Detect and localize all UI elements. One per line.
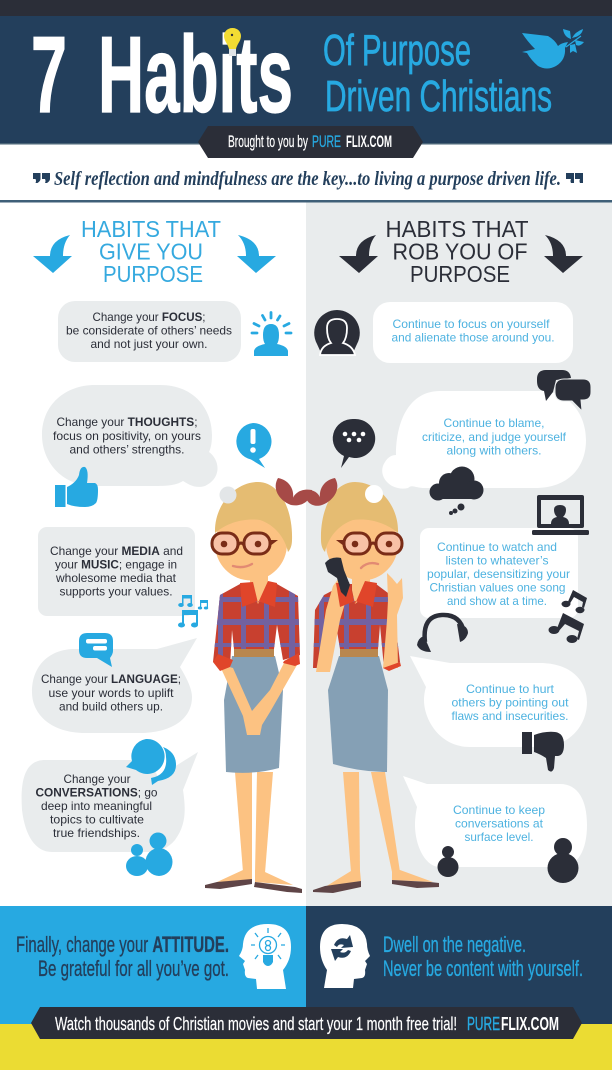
icon: person with rays bbox=[252, 312, 291, 356]
icon: two people blue bbox=[126, 832, 172, 876]
panel: hurt others bbox=[410, 656, 587, 747]
icon: person in dark circle bbox=[314, 310, 360, 355]
title: 7 Habits bbox=[31, 14, 293, 136]
shirt bbox=[313, 584, 400, 668]
banner: brought to you by bbox=[198, 126, 423, 158]
subtitle bbox=[323, 26, 552, 121]
icon: music notes blue bbox=[178, 595, 208, 628]
panel: language: use your words to uplift bbox=[48, 686, 174, 700]
panel: blame bbox=[382, 391, 586, 489]
neck bbox=[250, 574, 268, 604]
icon: chat circles bbox=[126, 739, 176, 785]
banner: free trial call to action bbox=[31, 1007, 582, 1039]
legs and feet bbox=[205, 772, 302, 893]
icon: dark cloud bbox=[430, 466, 484, 515]
smile bbox=[233, 564, 252, 567]
text: dwell on the negative bbox=[383, 932, 583, 981]
arrow: right blue bbox=[237, 235, 276, 273]
panel: language: Change your LANGUAGE; bbox=[41, 672, 181, 686]
subtitle: Of Purpose bbox=[323, 26, 471, 75]
face bbox=[215, 508, 287, 580]
panel: watch and listen: Continue to watch and bbox=[437, 540, 557, 554]
arm holding phone bbox=[316, 574, 349, 672]
heading: habits that rob you of purpose: PURPOSE bbox=[410, 261, 510, 287]
panel: conversations: true friendships. bbox=[53, 826, 140, 840]
heading: habits that give you purpose bbox=[81, 216, 221, 287]
icon: exclamation bubble bbox=[236, 423, 272, 468]
heading: habits that give you purpose: PURPOSE bbox=[103, 261, 203, 287]
arrow: left blue bbox=[33, 235, 72, 273]
icon: headphones bbox=[417, 615, 468, 652]
skirt bbox=[328, 656, 388, 772]
icon: two people dark bbox=[438, 838, 578, 883]
character: happy girl bbox=[205, 478, 312, 893]
text: attitude: Finally, change your ATTITUDE. bbox=[16, 932, 229, 957]
panel: watch and listen: and show at a time. bbox=[447, 594, 547, 608]
legs and feet bbox=[313, 772, 439, 893]
panel: media: your MUSIC; engage in bbox=[55, 558, 177, 572]
panel: conversations: topics to cultivate bbox=[50, 812, 144, 826]
collar bbox=[240, 581, 277, 607]
panel: media: Change your MEDIA and bbox=[50, 544, 183, 558]
heading: habits that give you purpose: GIVE YOU bbox=[99, 238, 203, 264]
glasses bbox=[336, 533, 402, 554]
panel: hurt others: Continue to hurt bbox=[466, 682, 555, 696]
icon: head with lightbulb bbox=[239, 924, 291, 989]
hair bbox=[215, 482, 292, 552]
icon: laptop bbox=[532, 495, 589, 535]
thought bubble circle left bbox=[220, 486, 236, 504]
panel: thoughts: Change your THOUGHTS; bbox=[56, 415, 198, 429]
heading: habits that rob you of purpose: ROB YOU OF bbox=[392, 238, 528, 264]
icon: dark speech bubble with dots bbox=[333, 419, 375, 468]
panel: focus: Change your FOCUS; bbox=[92, 310, 206, 324]
glasses bbox=[212, 533, 278, 554]
icon: light bulb bbox=[224, 28, 241, 56]
icon: chat message bbox=[79, 633, 113, 667]
icon: music notes dark bbox=[548, 590, 587, 643]
bow bbox=[304, 478, 337, 506]
text: attitude bbox=[16, 932, 229, 981]
shirt bbox=[210, 584, 305, 671]
panel: language: and build others up. bbox=[59, 700, 163, 714]
belt bbox=[340, 648, 378, 657]
panel: surface level: surface level. bbox=[464, 830, 534, 844]
icon: two chat bubbles bbox=[537, 370, 591, 411]
character: worried girl on phone bbox=[304, 478, 439, 893]
banner: brought to you by: FLIX.COM bbox=[346, 133, 392, 151]
panel: thoughts: and others’ strengths. bbox=[70, 442, 184, 456]
panel: thoughts bbox=[42, 385, 218, 487]
heading: habits that give you purpose: HABITS THAT bbox=[81, 216, 221, 242]
panel: focus on yourself bbox=[373, 302, 573, 363]
panel: watch and listen: popular, desensitizing your bbox=[427, 567, 570, 581]
icon: dove bbox=[522, 29, 584, 68]
panel: focus: and not just your own. bbox=[90, 337, 208, 351]
panel: blame: Continue to blame, bbox=[444, 416, 544, 430]
panel: language bbox=[32, 638, 197, 733]
frown bbox=[361, 563, 378, 568]
banner: brought to you by: PURE bbox=[312, 133, 341, 151]
panel: conversations: CONVERSATIONS; go bbox=[36, 786, 158, 800]
panel: focus on yourself: and alienate those around you. bbox=[392, 330, 554, 344]
banner: free trial call to action: Watch thousands of Christian movies and start your 1 month free trial! bbox=[55, 1013, 457, 1034]
panel: watch and listen: listen to whatever’s bbox=[446, 554, 548, 568]
belt bbox=[234, 648, 274, 657]
heading: habits that rob you of purpose: HABITS THAT bbox=[386, 216, 528, 242]
panel: blame: criticize, and judge yourself bbox=[422, 430, 567, 444]
panel: blame: along with others. bbox=[446, 444, 542, 458]
panel: media bbox=[38, 527, 195, 616]
panel: surface level: Continue to keep bbox=[453, 803, 545, 817]
icon: thumbs down bbox=[522, 732, 564, 772]
panel: surface level: conversations at bbox=[455, 816, 544, 830]
hair bbox=[321, 482, 398, 552]
skirt bbox=[224, 656, 283, 773]
icon: thumbs up bbox=[55, 467, 98, 507]
panel: hurt others: flaws and insecurities. bbox=[452, 709, 568, 723]
panel: focus: be considerate of others’ needs bbox=[66, 324, 232, 338]
panel: focus bbox=[58, 301, 241, 362]
thought bubble circle right bbox=[365, 485, 383, 503]
panel: media: supports your values. bbox=[60, 584, 172, 598]
heading: habits that rob you of purpose bbox=[386, 216, 528, 287]
panel: surface level bbox=[403, 776, 587, 867]
panel: watch and listen bbox=[420, 528, 578, 618]
arrow: left dark bbox=[339, 235, 378, 273]
title: 7 Habits: 7 bbox=[31, 14, 67, 136]
panel: thoughts: focus on positivity, on yours bbox=[53, 429, 201, 443]
neck bbox=[352, 574, 370, 604]
arms and hands bbox=[219, 663, 297, 735]
panel: hurt others: others by pointing out bbox=[452, 696, 569, 710]
text: attitude: Be grateful for all you’ve got. bbox=[38, 956, 229, 981]
arm at chin bbox=[383, 573, 403, 668]
text: dwell on the negative: Dwell on the negative. bbox=[383, 932, 526, 957]
panel: media: wholesome media that bbox=[55, 571, 177, 585]
panel: conversations: Change your bbox=[64, 772, 130, 786]
banner: free trial call to action: PURE bbox=[467, 1013, 500, 1034]
panel: conversations bbox=[22, 752, 198, 852]
phone bbox=[325, 558, 350, 597]
panel: watch and listen: Christian values one song bbox=[430, 580, 566, 594]
collar bbox=[336, 581, 377, 607]
title: 7 Habits: Habits bbox=[98, 14, 293, 136]
bow bbox=[276, 478, 312, 505]
icon: head with arrows bbox=[320, 924, 370, 988]
banner: brought to you by: Brought to you by bbox=[228, 133, 308, 151]
arrow: right dark bbox=[544, 235, 583, 273]
panel: conversations: deep into meaningful bbox=[41, 799, 152, 813]
banner: free trial call to action: FLIX.COM bbox=[501, 1013, 559, 1034]
panel: focus on yourself: Continue to focus on yourself bbox=[392, 317, 550, 331]
face bbox=[326, 508, 398, 580]
